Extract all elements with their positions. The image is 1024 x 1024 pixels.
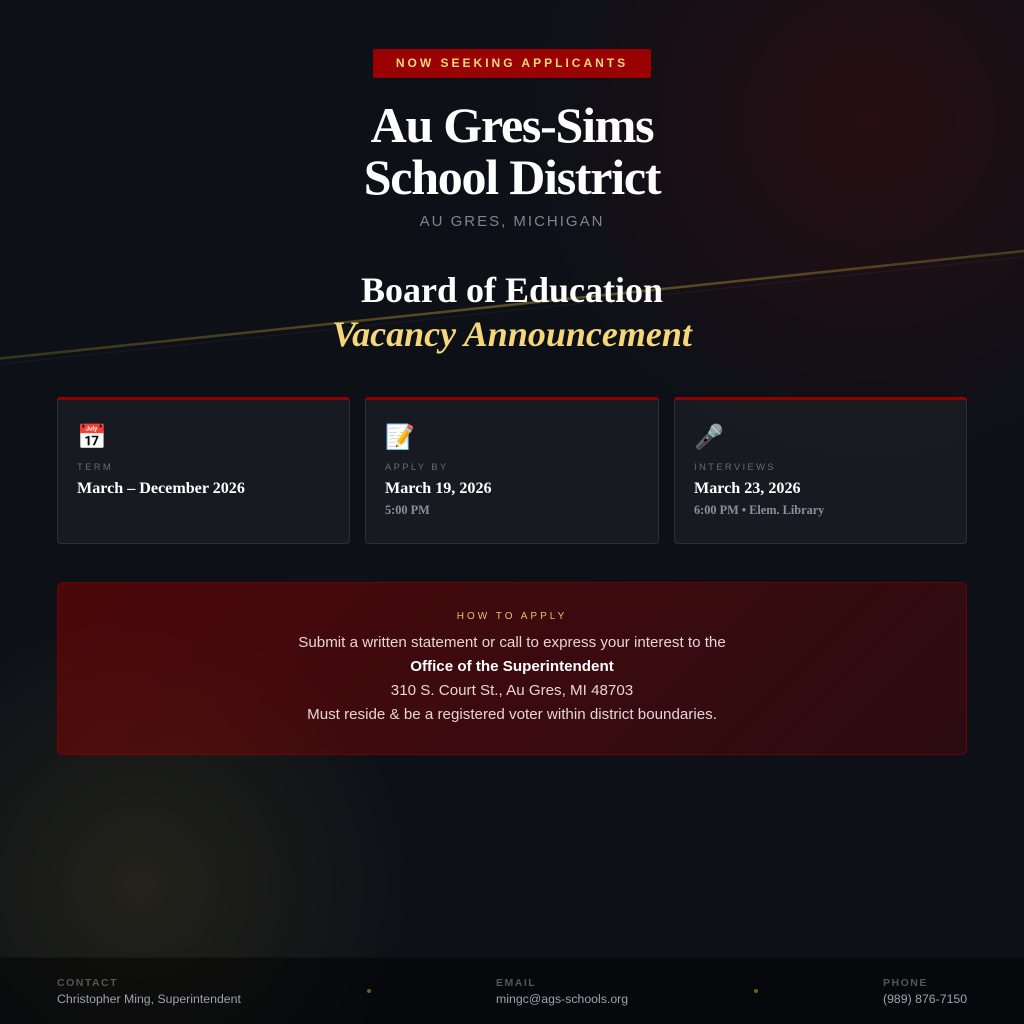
icon: microphone: 🎤: [694, 423, 724, 451]
title: district name: Au Gres-Sims: [371, 97, 653, 153]
text block: application instructions: Office of the Superintendent: [410, 658, 614, 675]
value: term dates: March – December 2026: [77, 480, 245, 497]
footer: phone: (989) 876-7150: [883, 992, 967, 1006]
card: interviews: [674, 397, 967, 544]
icon: calendar: 📅: [77, 423, 107, 451]
title: district name: School District: [364, 149, 660, 205]
value: deadline date: March 19, 2026: [385, 480, 492, 497]
footer: contact: [57, 977, 241, 1006]
label: apply by: APPLY BY: [385, 462, 448, 473]
badge: now seeking applicants: [373, 49, 651, 78]
footer: contact: Christopher Ming, Superintendent: [57, 992, 241, 1006]
label: term: TERM: [77, 462, 113, 473]
panel: how to apply: [57, 582, 967, 755]
heading: how to apply: HOW TO APPLY: [457, 611, 567, 622]
value: interview date: March 23, 2026: [694, 480, 801, 497]
footer: phone: PHONE: [883, 977, 928, 989]
card: term: [57, 397, 350, 544]
badge: now seeking applicants: NOW SEEKING APPLICANTS: [396, 56, 628, 70]
footer: phone: [883, 977, 967, 1006]
card: apply by: [365, 397, 659, 544]
footer: email: [496, 977, 628, 1006]
footer: email: mingc@ags-schools.org: [496, 992, 628, 1006]
text block: application instructions: Submit a written statement or call to express your interest to the: [298, 634, 726, 651]
detail: interview time and place: 6:00 PM • Elem. Library: [694, 503, 824, 517]
footer: contact: CONTACT: [57, 977, 118, 989]
subtitle: location: AU GRES, MICHIGAN: [420, 213, 604, 230]
text block: application instructions: Must reside & be a registered voter within district boundaries.: [307, 706, 717, 723]
footer bar: [0, 957, 1024, 1024]
detail: deadline time: 5:00 PM: [385, 503, 430, 517]
footer: email: EMAIL: [496, 977, 536, 989]
label: interviews: INTERVIEWS: [694, 462, 776, 473]
heading: board of education: Board of Education: [361, 270, 663, 310]
heading: vacancy announcement: Vacancy Announcement: [332, 314, 692, 354]
text block: application instructions: 310 S. Court St., Au Gres, MI 48703: [391, 682, 633, 699]
text block: application instructions: [298, 634, 726, 723]
title: district name: [364, 97, 662, 205]
icon: memo: 📝: [385, 423, 415, 451]
